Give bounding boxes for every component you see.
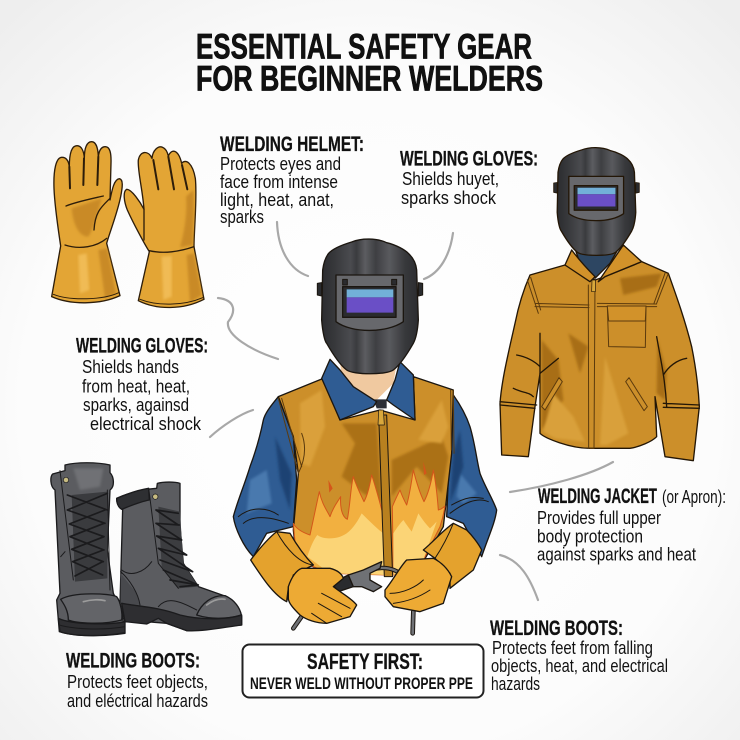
icon: jacket with helmet: [500, 148, 699, 461]
text block: welding jacket: Provides full upper: [537, 508, 661, 528]
sleeves: [233, 395, 497, 557]
text block: welding boots left: WELDING BOOTS:: [66, 650, 200, 672]
text block: welding helmet: Protects eyes and: [220, 154, 341, 174]
text block: welding gloves left: WELDING GLOVES:: [76, 334, 208, 358]
text block: welding boots right: WELDING BOOTS:: [490, 617, 623, 640]
helmet: [317, 239, 423, 374]
vest: [278, 377, 454, 573]
left glove: [52, 142, 122, 303]
callout: safety first: [242, 644, 484, 698]
text block: welding helmet: WELDING HELMET:: [220, 133, 364, 156]
text block: welding boots left: and eléctrical hazards: [67, 691, 208, 711]
icon: welding boots pair: [51, 463, 242, 636]
text block: welding helmet: sparks: [220, 207, 264, 227]
text block: welding helmet: face from intense: [220, 172, 338, 192]
text block: welding gloves left: Shields hands: [82, 357, 179, 377]
main figure: welder: [233, 239, 497, 633]
text block: welding boots right: objects, heat, and electrical: [491, 656, 668, 676]
text block: welding gloves right: sparks shock: [401, 188, 497, 208]
text block: welding gloves left: electrical shock: [90, 414, 202, 434]
text block: welding jacket: [537, 485, 726, 564]
text block: welding boots right: hazards: [491, 674, 540, 694]
text block: welding jacket: WELDING JACKET: [538, 485, 657, 508]
small helmet: [554, 148, 639, 255]
callout: safety first: NEVER WELD WITHOUT PROPER PPE: [250, 674, 473, 693]
right boot: [117, 482, 242, 631]
icon: welding gloves pair: [52, 142, 204, 308]
torch and cable: [293, 562, 413, 633]
text block: welding gloves left: from heat, heat,: [82, 376, 190, 396]
text block: welding helmet: [220, 133, 364, 227]
flames: [293, 462, 445, 575]
title: FOR BEGINNER WELDERS: [196, 60, 543, 98]
callout: safety first: SAFETY FIRST:: [307, 649, 423, 674]
title: [196, 28, 543, 98]
text block: welding gloves right: [400, 148, 538, 208]
right glove: [124, 147, 204, 308]
text block: welding boots right: [490, 617, 668, 694]
neck and collar: [322, 359, 415, 420]
connector lines: [210, 222, 613, 600]
text block: welding boots left: Protects feet objects,: [67, 672, 208, 692]
text block: welding gloves left: sparks, againsd: [83, 395, 189, 415]
jacket: [500, 245, 699, 461]
title: ESSENTIAL SAFETY GEAR: [196, 28, 532, 66]
text block: welding jacket: body protection: [537, 526, 643, 546]
text block: welding gloves right: WELDING GLOVES:: [400, 148, 538, 170]
text block: welding gloves right: Shields huyet,: [402, 169, 499, 189]
text block: welding helmet: light, heat, anat,: [220, 190, 334, 210]
left boot: [51, 463, 125, 636]
text block: welding boots right: Protects feet from falling: [492, 638, 653, 658]
text block: welding boots left: [66, 650, 208, 711]
text block: welding jacket: against sparks and heat: [537, 544, 696, 564]
gloves: [251, 523, 482, 623]
zipper: [378, 410, 393, 577]
text block: welding gloves left: [76, 334, 208, 434]
